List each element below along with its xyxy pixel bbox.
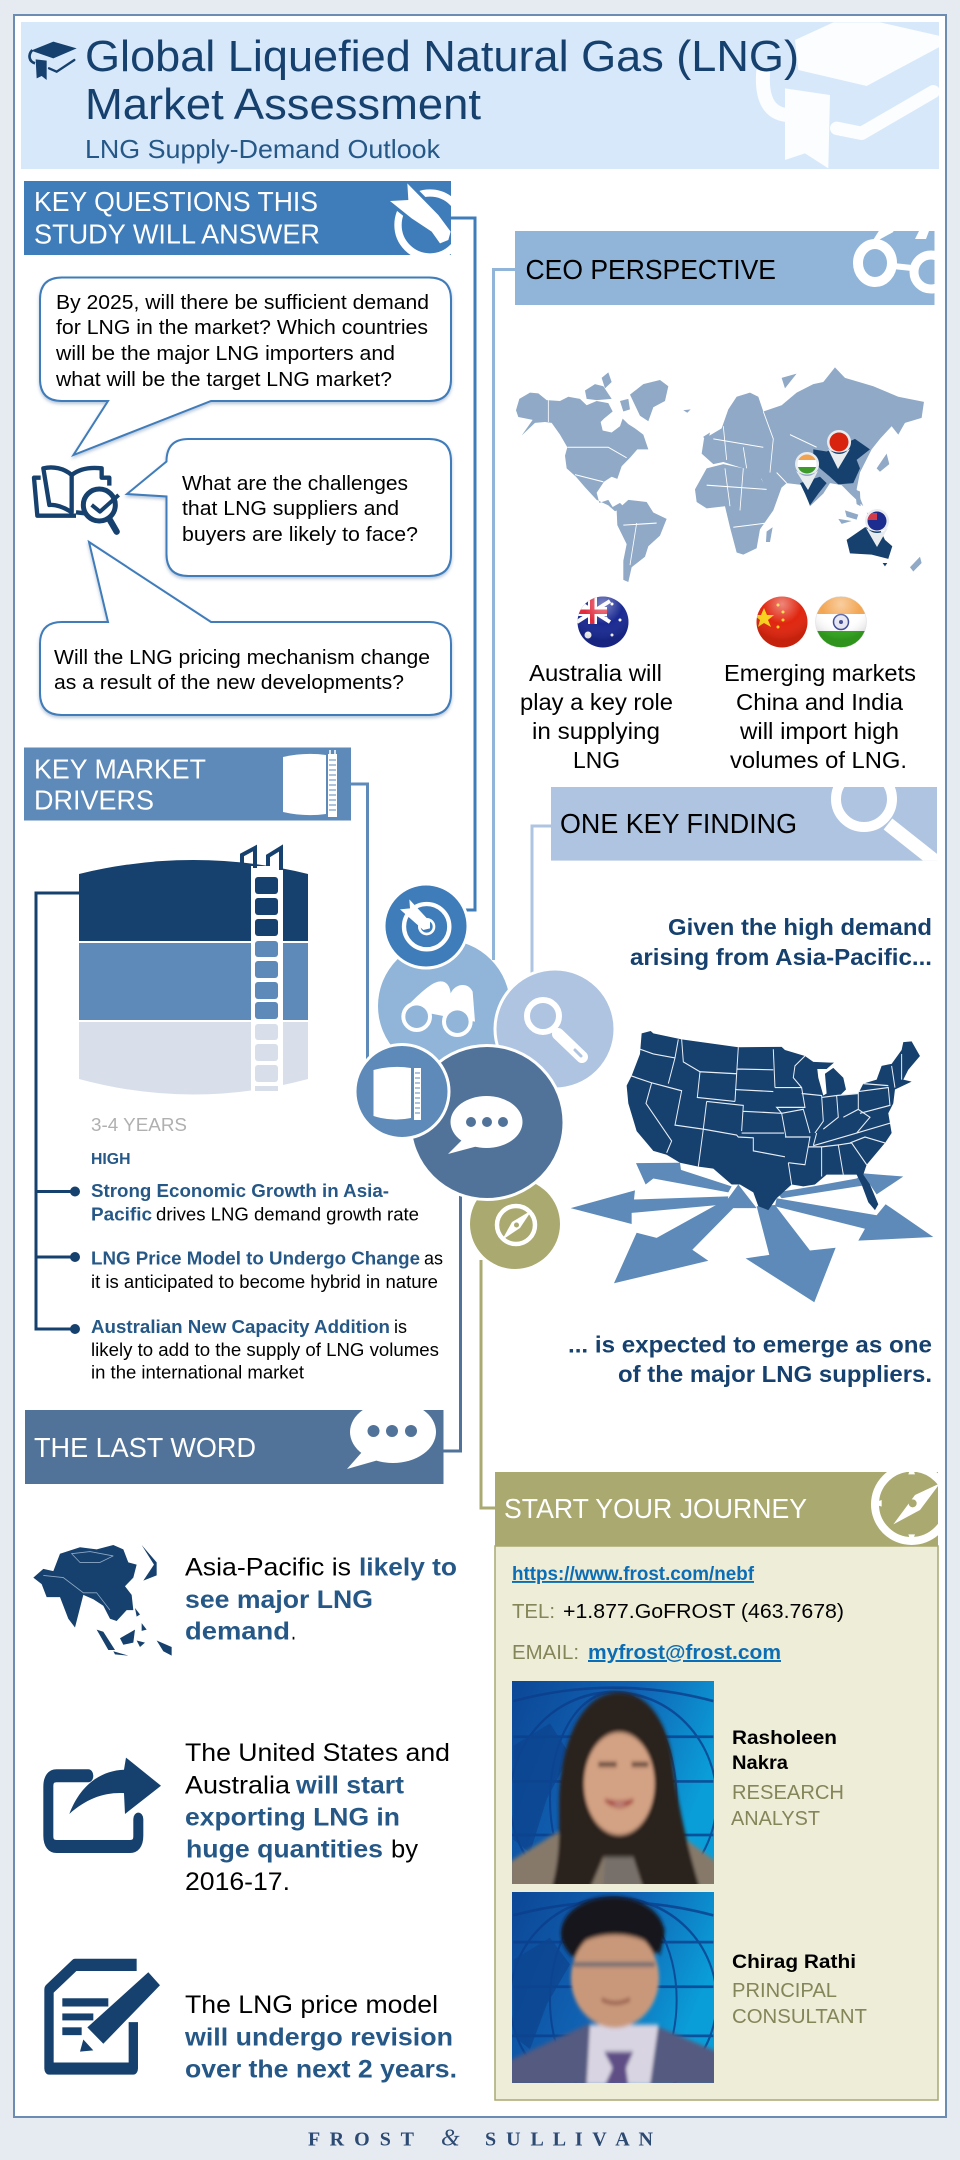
footer logo text: & [441,2126,460,2152]
text: expected to emerge: ... is expected to emerge as one [568,1332,932,1358]
ghost graduation cap icon [763,22,940,168]
bracket connector [36,893,79,1332]
world map [516,367,924,582]
last word 1: Asia-Pacific is [185,1554,351,1582]
heading: CEO perspective [515,231,948,305]
circle: tank [355,1044,449,1138]
driver 1: Pacific [91,1204,152,1224]
person: Chirag Rathi: Chirag Rathi [732,1952,856,1973]
contact telephone: TEL: [512,1601,555,1623]
person: Chirag Rathi: CONSULTANT [732,2006,867,2028]
driver 2: it is anticipated to become hybrid in nature [91,1272,438,1292]
last word 2: The United States and [185,1739,450,1767]
heading: start your journey: START YOUR JOURNEY [504,1493,807,1524]
icon: target with arrow [390,184,451,255]
speech bubble: question 2 [127,439,451,576]
last word 2: huge quantities [186,1836,383,1864]
last word 2: will start [295,1772,405,1800]
heading: key market drivers [24,748,351,820]
central circle cluster [355,884,615,1269]
heading: key questions: STUDY WILL ANSWER [34,218,320,250]
speech bubble: question 1: By 2025, will there be sufficient demand [56,292,429,314]
last word 3: The LNG price model [185,1991,438,2019]
driver 2: as [424,1248,443,1268]
photo: Chirag Rathi [512,1892,714,2083]
contact email [512,1642,781,1664]
speech bubble: question 1 [40,278,451,455]
person: Rasholeen Nakra [731,1728,844,1830]
flag: China [754,596,808,648]
driver 3 [91,1317,439,1382]
driver 1: drives LNG demand growth rate [156,1204,419,1224]
speech bubble: question 2: that LNG suppliers and [182,498,399,520]
last word 3 [184,1991,457,2084]
last word 2: 2016-17. [185,1868,290,1896]
text: expected to emerge: of the major LNG suppliers. [618,1361,932,1387]
label: impact: HIGH [91,1151,130,1168]
circle: target [384,884,468,968]
icon: magnifier [831,787,937,860]
label: time frame: 3-4 YEARS [91,1115,187,1135]
flag: India [815,596,867,649]
small graduation cap icon [30,42,77,80]
text: emerging markets: volumes of LNG. [730,747,907,773]
driver 3: in the international market [91,1362,304,1382]
text: expected to emerge [568,1332,932,1387]
heading: one key finding [551,787,937,861]
driver 1: Strong Economic Growth in Asia- [91,1181,389,1201]
person: Chirag Rathi [732,1952,867,2028]
icon: Asia-Pacific map [33,1545,172,1656]
text: given the high demand [630,914,932,970]
footer logo text [308,2126,654,2152]
circle: chat [410,1046,564,1200]
header panel [21,22,940,169]
speech bubble: question 1: what will be the target LNG market? [55,369,392,391]
flag: Australia [577,596,629,648]
last word 1: . [291,1618,296,1646]
heading: start your journey [495,1472,938,1546]
person: Rasholeen Nakra: Rasholeen [732,1728,837,1749]
driver 3: Australian New Capacity Addition [91,1317,390,1337]
driver 1 [91,1181,419,1224]
text: given the high demand: Given the high demand [668,914,932,940]
last word 2: Australia [185,1772,290,1800]
person: Rasholeen Nakra: Nakra [732,1753,788,1774]
driver 3: likely to add to the supply of LNG volumes [91,1340,439,1360]
last word 1: likely to [359,1554,457,1582]
panel: start your journey [495,1465,948,2103]
text: emerging markets: will import high [739,718,899,744]
speech bubble: question 1: for LNG in the market? Which countries [56,317,428,339]
icon: tank [283,750,337,817]
speech bubble: question 3: as a result of the new developments? [54,672,404,694]
text: emerging markets [724,660,916,773]
circle: magnifier [495,969,615,1089]
heading: one key finding: ONE KEY FINDING [560,808,797,839]
speech bubble: question 2: What are the challenges [182,473,408,495]
photo: Rasholeen Nakra [512,1681,714,1884]
heading: key market drivers: DRIVERS [34,784,154,816]
last word 2: exporting LNG in [185,1804,400,1832]
icon: speech bubble [347,1410,436,1469]
circle: binoculars [378,940,510,1072]
footer logo text: F R O S T [308,2128,415,2150]
heading: key market drivers: KEY MARKET [34,754,206,784]
person: Rasholeen Nakra: RESEARCH [732,1782,844,1804]
heading: the last word: THE LAST WORD [34,1432,256,1463]
export arrows [571,1163,933,1302]
contact email: EMAIL: [512,1642,579,1664]
heading: CEO perspective: CEO PERSPECTIVE [526,254,776,285]
ladder [242,848,283,1091]
footer logo text: S U L L I V A N [485,2128,654,2150]
tank chart [79,848,308,1094]
icon: book with magnifier [34,467,119,532]
contact email: myfrost@frost.com [588,1642,781,1664]
last word 3: over the next 2 years. [185,2056,457,2084]
text: Australia: in supplying [532,718,660,744]
US map [627,1031,920,1210]
last word 1 [185,1554,457,1646]
text: Australia: Australia will [529,660,662,686]
text: Australia: play a key role [520,689,673,715]
last word 1: see major LNG [185,1586,373,1614]
last word 2 [185,1739,450,1896]
person: Rasholeen Nakra: ANALYST [731,1808,820,1830]
icon: document and pencil [49,1965,160,2069]
speech bubble: question 2: buyers are likely to face? [182,524,418,546]
icon: share arrow [48,1758,161,1846]
driver 3: is [394,1317,407,1337]
title [85,32,799,129]
last word 2: by [391,1836,419,1864]
title: Market Assessment [85,80,481,129]
heading: key questions: KEY QUESTIONS THIS [34,186,318,217]
person: Chirag Rathi: PRINCIPAL [732,1980,837,2002]
last word 1: demand [185,1618,290,1646]
text: Australia: LNG [573,747,620,773]
speech bubble: question 3 [40,542,451,715]
driver 2: LNG Price Model to Undergo Change [91,1248,420,1268]
connector lines [351,218,551,1508]
circle: compass [470,1179,560,1269]
title: Global Liquefied Natural Gas (LNG) [85,32,799,81]
heading: the last word [25,1410,444,1484]
driver 2 [91,1248,443,1292]
contact telephone: +1.877.GoFROST (463.7678) [563,1601,844,1623]
map pin: India [795,452,819,490]
subtitle: LNG Supply-Demand Outlook [85,134,441,164]
icon: binoculars [858,231,948,289]
heading: key questions [24,181,462,257]
speech bubble: question 1: will be the major LNG importers and [55,343,395,365]
contact link: https://www.frost.com/nebf [512,1564,755,1585]
text: emerging markets: Emerging markets [724,660,916,686]
icon: compass [871,1472,938,1545]
text: given the high demand: arising from Asia-Pacific... [630,944,932,970]
map pin: Australia [865,509,889,547]
map pin: China [827,430,852,469]
last word 3: will undergo revision [184,2024,453,2052]
text: emerging markets: China and India [736,689,903,715]
highlighted countries [800,439,892,566]
text: Australia [520,660,673,773]
speech bubble: question 3: Will the LNG pricing mechanism change [54,647,430,669]
